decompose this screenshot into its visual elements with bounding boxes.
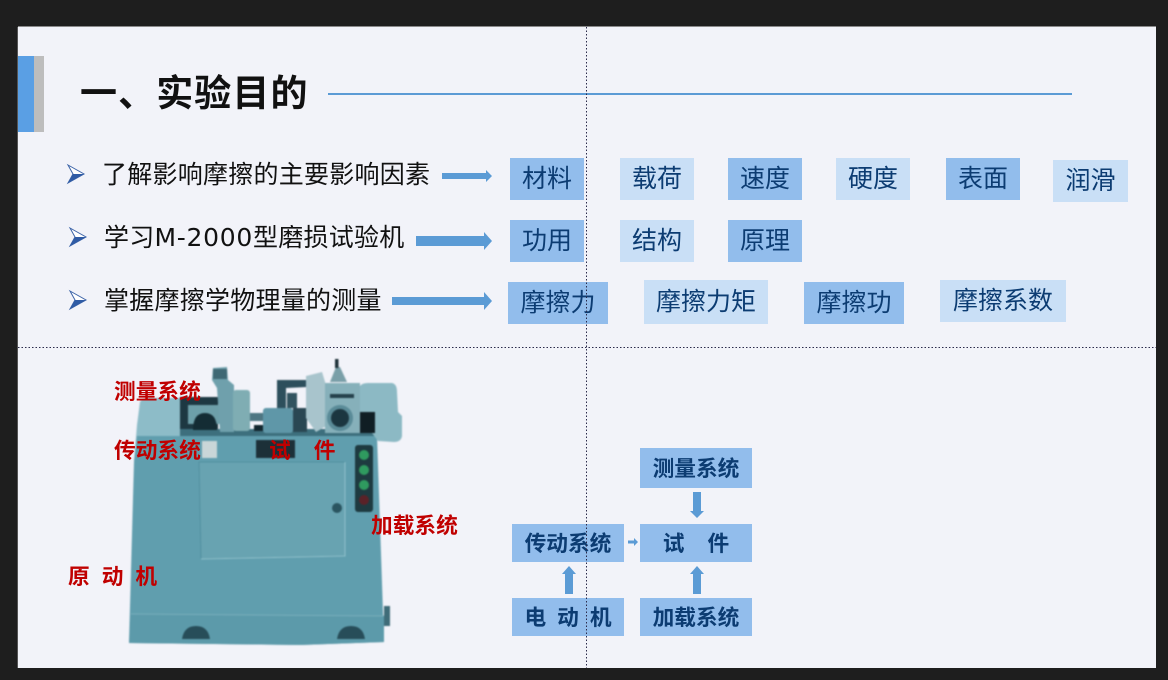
label: 传动系统: 传动系统 [114, 438, 201, 463]
tag: 速度 [728, 158, 802, 200]
dark frame of measuring unit [180, 397, 218, 433]
flow box: 测量系统 [640, 448, 752, 488]
tag: 结构 [620, 220, 694, 262]
tag: 摩擦力矩 [644, 280, 768, 324]
title rule [328, 93, 1072, 95]
tag: 硬度 [836, 158, 910, 200]
arrow 1 [442, 170, 492, 182]
tag: 摩擦功: 摩擦功 [816, 288, 892, 316]
tag: 摩擦力矩: 摩擦力矩 [656, 288, 756, 316]
tag: 润滑 [1053, 160, 1128, 202]
flow box: 试件: 试 件 [663, 530, 729, 556]
upper frame [277, 380, 307, 408]
flow box: 传动系统: 传动系统 [525, 530, 611, 556]
right motor [360, 383, 402, 442]
flow box: 传动系统 [512, 524, 624, 562]
flow box: 试件 [640, 524, 752, 562]
main body [129, 436, 384, 645]
arrow: 测量系统 to 试件 [690, 492, 704, 518]
icon: bullet 3 [68, 290, 87, 310]
hub [263, 408, 293, 433]
title: 一、实验目的 [80, 73, 309, 114]
spindle [330, 367, 347, 382]
tag: 载荷: 载荷 [632, 164, 682, 192]
bullet text 2: 学习M-2000型磨损试验机 [104, 223, 404, 252]
arrow: 传动系统 to 试件 [628, 538, 638, 546]
tag: 结构: 结构 [632, 226, 682, 254]
bullet text 3: 掌握摩擦学物理量的测量 [104, 287, 382, 315]
measuring unit body [188, 405, 230, 424]
tag: 摩擦系数: 摩擦系数 [953, 286, 1053, 314]
label: 测量系统: 测量系统 [114, 379, 201, 404]
left housing [134, 398, 182, 462]
tag: 摩擦系数 [940, 280, 1066, 322]
nameplates [202, 441, 217, 458]
icon: title accent bars [18, 56, 44, 132]
arrow 3 [392, 292, 492, 310]
arrow: 电动机 to 传动系统 [562, 566, 576, 594]
base strip [129, 614, 384, 645]
bearing [193, 413, 217, 430]
head [325, 383, 360, 433]
tag: 摩擦力 [508, 282, 608, 324]
column [306, 372, 328, 432]
label: 原动机: 原 动 机 [68, 564, 157, 589]
tag: 功用: 功用 [522, 226, 572, 254]
feet handles [182, 626, 210, 639]
flow box: 电动机: 电 动 机 [524, 604, 612, 630]
tag: 润滑: 润滑 [1065, 166, 1116, 194]
arrow: 加载系统 to 试件 [690, 566, 704, 594]
handwheel [327, 405, 353, 431]
grinding wheel [233, 390, 250, 431]
tag: 表面: 表面 [958, 164, 1008, 192]
tag: 原理: 原理 [740, 226, 790, 254]
label: 试 件: 试 件 [269, 438, 335, 463]
icon: bullet 1 [66, 164, 85, 184]
tag: 硬度: 硬度 [848, 164, 898, 192]
indicator panel [355, 445, 373, 512]
tag: 摩擦功 [804, 282, 904, 324]
flow box: 电动机 [512, 598, 624, 636]
shaft [250, 413, 264, 421]
arm and knob [212, 367, 234, 432]
tag: 材料 [510, 158, 584, 200]
arrow 2 [416, 232, 492, 250]
door [199, 462, 345, 559]
flow box: 加载系统: 加载系统 [653, 604, 739, 630]
tag: 功用 [510, 220, 584, 262]
tag: 载荷 [620, 158, 694, 200]
label: 加载系统: 加载系统 [371, 513, 458, 538]
tag: 速度: 速度 [740, 164, 790, 192]
tag: 摩擦力: 摩擦力 [520, 288, 596, 316]
icon: bullet 2 [68, 226, 87, 248]
bullet text 1: 了解影响摩擦的主要影响因素 [102, 161, 430, 189]
flow box: 测量系统: 测量系统 [653, 456, 739, 480]
tag: 材料: 材料 [522, 164, 572, 192]
tag: 表面 [946, 158, 1020, 200]
tag: 原理 [728, 220, 802, 262]
flow box: 加载系统 [640, 598, 752, 636]
